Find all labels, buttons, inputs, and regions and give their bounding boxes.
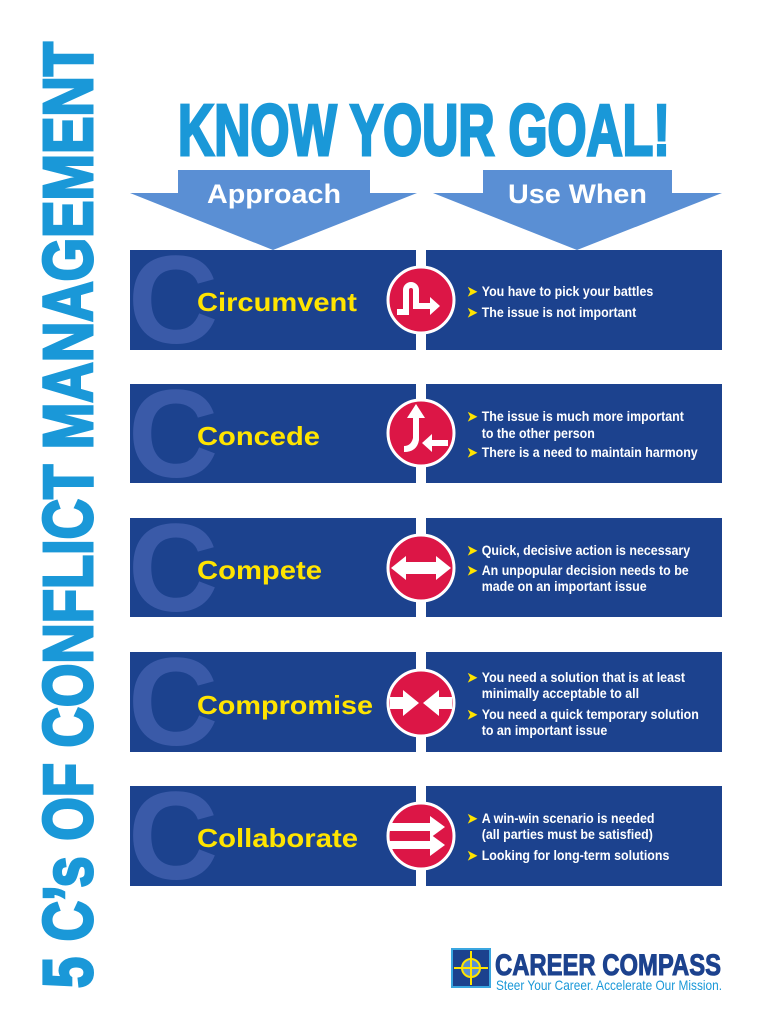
arrow: Approach: Approach — [207, 179, 341, 209]
row: Compete — [130, 518, 722, 617]
row: Compromise — [130, 652, 722, 752]
bullets — [467, 284, 653, 320]
bullets: The issue is not important — [482, 305, 637, 320]
icon: collaborate — [388, 803, 454, 869]
row: Compromise: ➤ — [467, 670, 478, 685]
row: Collaborate: C — [128, 767, 218, 906]
bullets: ➤ — [467, 284, 478, 299]
icon: compromise — [388, 670, 454, 736]
row: Compromise: minimally acceptable to all — [482, 686, 639, 701]
row: Compromise: Compromise — [197, 690, 373, 720]
icon: concede — [388, 400, 454, 466]
row: Compromise: C — [128, 633, 218, 772]
row: Circumvent: Circumvent — [197, 287, 357, 317]
row: Compromise: You need a solution that is at least — [482, 670, 686, 685]
arrow: Use When: Use When — [508, 179, 647, 209]
icon: circumvent — [388, 267, 454, 333]
row: Concede: C — [128, 365, 218, 504]
row: Compete: made on an important issue — [482, 579, 647, 594]
row: Concede: ➤ — [467, 409, 478, 424]
row: Circumvent — [130, 250, 722, 350]
bullets: You have to pick your battles — [482, 284, 653, 299]
icon: compete — [388, 535, 454, 601]
row: Collaborate — [130, 786, 722, 886]
row: Compromise: You need a quick temporary solution — [482, 707, 699, 722]
row: Concede: ➤ — [467, 445, 478, 460]
row: Compete: Compete — [197, 555, 322, 585]
bullets: ➤ — [467, 305, 478, 320]
arrow: Use When — [433, 170, 722, 250]
row: Compromise: ➤ — [467, 707, 478, 722]
row: Compete: ➤ — [467, 543, 478, 558]
row: Concede: There is a need to maintain harmony — [482, 445, 698, 460]
row: Concede — [130, 384, 722, 483]
row: Compromise: to an important issue — [482, 723, 607, 738]
arrow: Approach — [130, 170, 417, 250]
row: Collaborate: A win-win scenario is needed — [482, 811, 655, 826]
row: Concede: to the other person — [482, 426, 595, 441]
row: Concede: The issue is much more important — [482, 409, 685, 424]
row: Collaborate: ➤ — [467, 848, 478, 863]
row: Concede: Concede — [197, 421, 320, 451]
row: Circumvent: C — [128, 231, 218, 370]
row: Collaborate: Looking for long-term solutions — [482, 848, 669, 863]
logo: Career Compass: Steer Your Career. Accelerate Our Mission. — [496, 977, 722, 993]
row: Compete: An unpopular decision needs to be — [482, 563, 689, 578]
logo: Career Compass — [452, 949, 722, 993]
row: Collaborate: (all parties must be satisfied) — [482, 827, 653, 842]
row: Compete: ➤ — [467, 563, 478, 578]
row: Collaborate: Collaborate — [197, 823, 358, 853]
row: Compete: C — [128, 499, 218, 638]
row: Collaborate: ➤ — [467, 811, 478, 826]
row: Compete: Quick, decisive action is necessary — [482, 543, 691, 558]
